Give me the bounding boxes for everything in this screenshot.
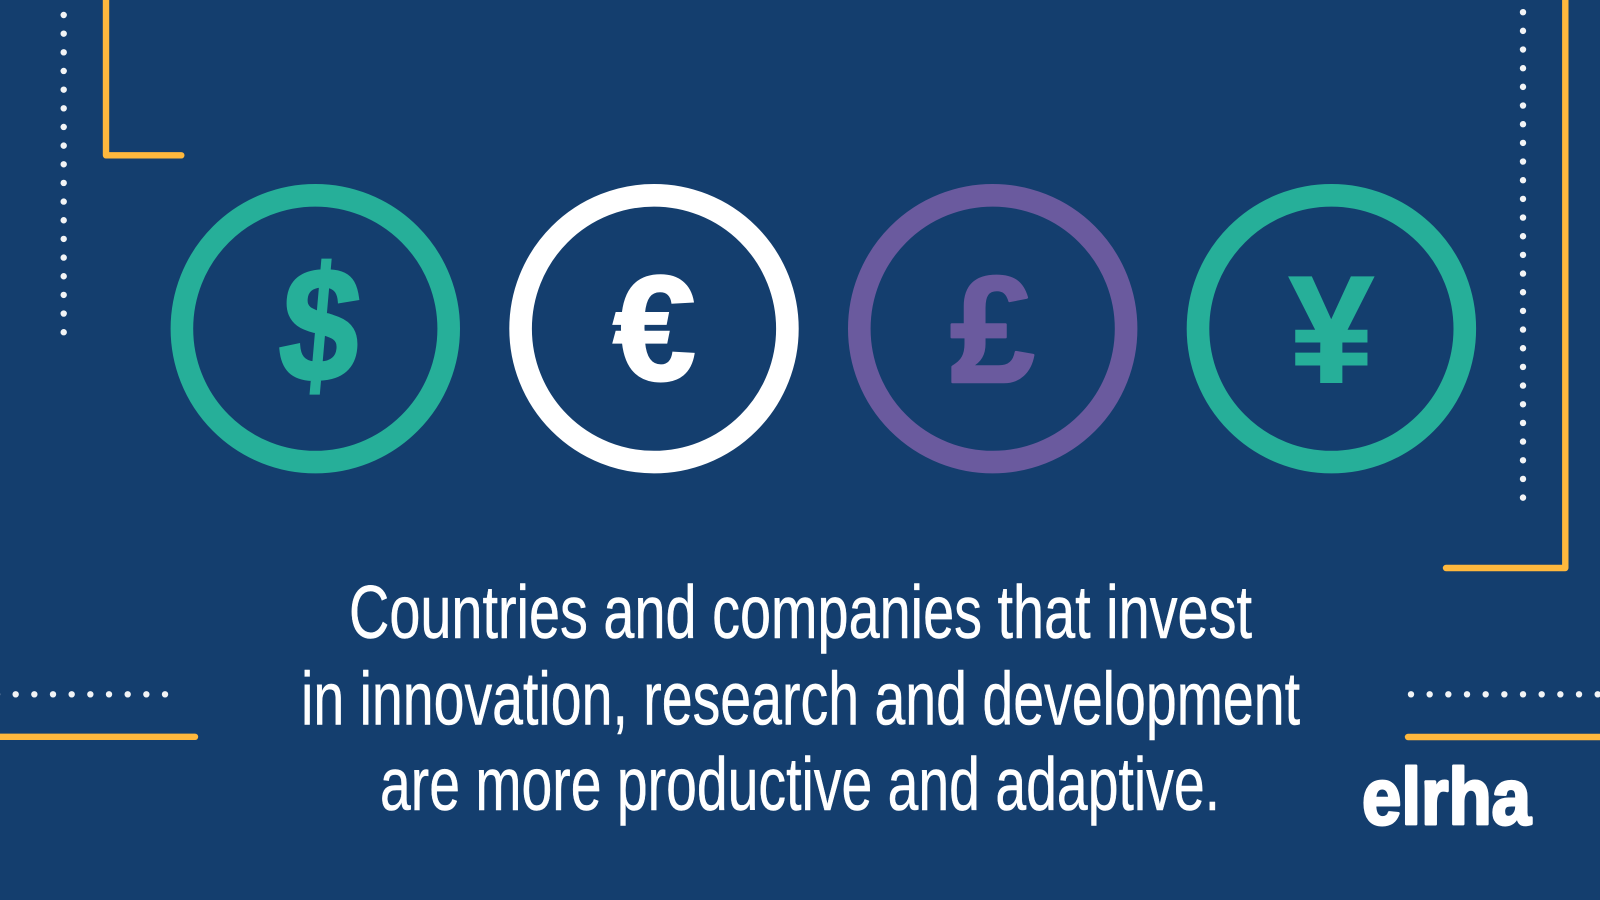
icon: pound coin (859, 195, 1126, 462)
icon: euro coin (521, 195, 787, 462)
logo: elrha: elrha (1362, 752, 1531, 841)
right vertical dotted line (1520, 12, 1526, 499)
bottom-left yellow line (0, 734, 195, 740)
bottom-right horizontal dotted line (1411, 691, 1600, 697)
icon: yen coin (1198, 195, 1465, 462)
icon: pound coin: £ (950, 245, 1035, 415)
main statement text: are more productive and adaptive. (380, 742, 1220, 826)
bottom-left horizontal dotted line (0, 691, 167, 697)
icon: dollar coin: $ (273, 234, 368, 416)
icon: dollar coin (182, 195, 449, 462)
bottom-right yellow line (1408, 734, 1600, 740)
icon: yen coin: ¥ (1289, 245, 1374, 415)
main statement text (301, 570, 1300, 826)
top-right yellow corner bracket (1446, 0, 1565, 568)
top-left yellow corner bracket (106, 0, 181, 155)
left vertical dotted line (61, 15, 67, 334)
icon: euro coin: € (613, 244, 696, 412)
main statement text: Countries and companies that invest (349, 570, 1252, 654)
